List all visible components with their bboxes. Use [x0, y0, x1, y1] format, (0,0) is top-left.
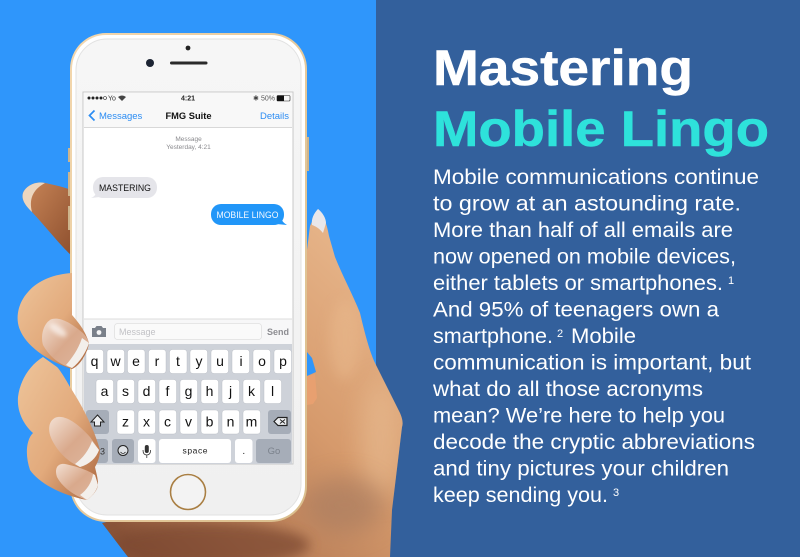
top letter row: p: [279, 353, 287, 369]
message input bar: Send: [267, 327, 289, 337]
status bar: 50%: [261, 96, 275, 102]
middle letter row: j: [228, 383, 232, 399]
body paragraph: and tiny pictures your children: [433, 458, 729, 480]
timestamp: Yesterday, 4:21: [166, 144, 211, 151]
bottom letter row: n: [227, 414, 234, 430]
top letter row: o: [258, 353, 266, 369]
body paragraph: And 95% of teenagers own a: [433, 298, 719, 322]
middle letter row: l: [271, 383, 274, 399]
body paragraph: 3: [613, 487, 619, 499]
middle letter row: f: [166, 383, 170, 399]
top letter row: u: [216, 353, 224, 369]
home button: [170, 474, 206, 510]
navigation bar: FMG Suite: [166, 111, 212, 122]
navigation bar: Details: [260, 111, 289, 122]
body paragraph: to grow at an astounding rate.: [433, 192, 741, 216]
body paragraph: what do all those acronyms: [432, 378, 703, 401]
dark blue text panel: [376, 0, 800, 557]
received bubble: MASTERING: [91, 177, 157, 198]
bottom function row: [86, 439, 291, 463]
timestamp: [166, 136, 211, 151]
middle letter row: s: [122, 383, 129, 399]
hand behind phone: palm and thumb: [102, 209, 403, 557]
thumb nail: [312, 209, 326, 233]
message input bar: Message: [119, 327, 156, 337]
body paragraph: decode the cryptic abbreviations: [433, 431, 755, 454]
middle letter row: k: [248, 383, 256, 399]
screen: [83, 92, 293, 510]
side buttons: [68, 137, 309, 230]
timestamp: Message: [175, 136, 202, 143]
bottom letter row: b: [206, 414, 214, 430]
status bar: Yo: [108, 96, 116, 102]
index finger behind phone: [23, 183, 72, 256]
bottom function row: Go: [268, 446, 280, 457]
body paragraph: now opened on mobile devices,: [433, 246, 736, 268]
status bar: [84, 93, 292, 127]
top letter row: y: [196, 353, 202, 369]
keyboard: [84, 344, 292, 464]
body paragraph: 1: [728, 275, 734, 287]
bottom letter row: [86, 410, 291, 434]
top letter row: [86, 350, 292, 374]
middle letter row: g: [185, 383, 192, 399]
top letter row: w: [109, 353, 121, 369]
camera: [146, 59, 154, 67]
little finger nail: [56, 464, 98, 500]
earpiece: [170, 62, 208, 64]
body paragraph: [432, 166, 759, 507]
body paragraph: mean? We’re here to help you: [433, 404, 725, 428]
body paragraph: keep sending you.: [433, 484, 608, 507]
fingertip behind phone: [307, 374, 317, 405]
bottom function row: space: [182, 446, 208, 456]
body paragraph: More than half of all emails are: [433, 219, 733, 242]
title: Mobile Lingo: [433, 101, 769, 157]
body paragraph: either tablets or smartphones.: [433, 272, 723, 295]
top letter row: r: [155, 353, 160, 369]
sent bubble: MOBILE LINGO: MOBILE LINGO: [216, 210, 278, 220]
sent bubble: MOBILE LINGO: [211, 204, 287, 225]
bottom letter row: x: [143, 414, 150, 430]
status bar: ✱: [253, 94, 259, 102]
middle letter row: a: [101, 383, 109, 399]
bottom letter row: c: [164, 414, 171, 430]
nail of index finger: [23, 183, 45, 212]
top letter row: q: [91, 353, 98, 369]
top letter row: t: [176, 353, 180, 369]
top letter row: i: [239, 353, 243, 369]
body paragraph: Mobile: [571, 325, 636, 348]
navigation bar: [84, 110, 292, 128]
bottom function row: .: [242, 446, 245, 457]
body paragraph: Mobile communications continue: [433, 166, 759, 189]
status bar: 4:21: [181, 96, 195, 102]
bottom letter row: z: [122, 414, 129, 430]
middle letter row: d: [143, 383, 150, 399]
title: [433, 40, 769, 157]
bottom function row: 3: [100, 446, 105, 456]
title: Mastering: [433, 40, 693, 96]
top letter row: e: [132, 353, 140, 369]
body paragraph: 2: [557, 328, 563, 340]
message input bar: [84, 318, 292, 346]
navigation bar: Messages: [99, 111, 143, 122]
gap between thumb and phone: [307, 352, 316, 376]
speaker dot: [186, 46, 190, 50]
middle letter row: [96, 380, 282, 404]
body paragraph: smartphone.: [433, 325, 553, 348]
received bubble: MASTERING: MASTERING: [99, 183, 151, 193]
ring and little fingers with nails: [18, 357, 100, 500]
phone body: [70, 33, 307, 522]
bottom letter row: v: [185, 414, 192, 430]
body paragraph: communication is important, but: [433, 352, 751, 374]
ring finger nail: [49, 417, 99, 467]
middle letter row: h: [206, 383, 213, 399]
middle finger with nail: [18, 273, 89, 369]
bottom letter row: m: [246, 414, 257, 430]
